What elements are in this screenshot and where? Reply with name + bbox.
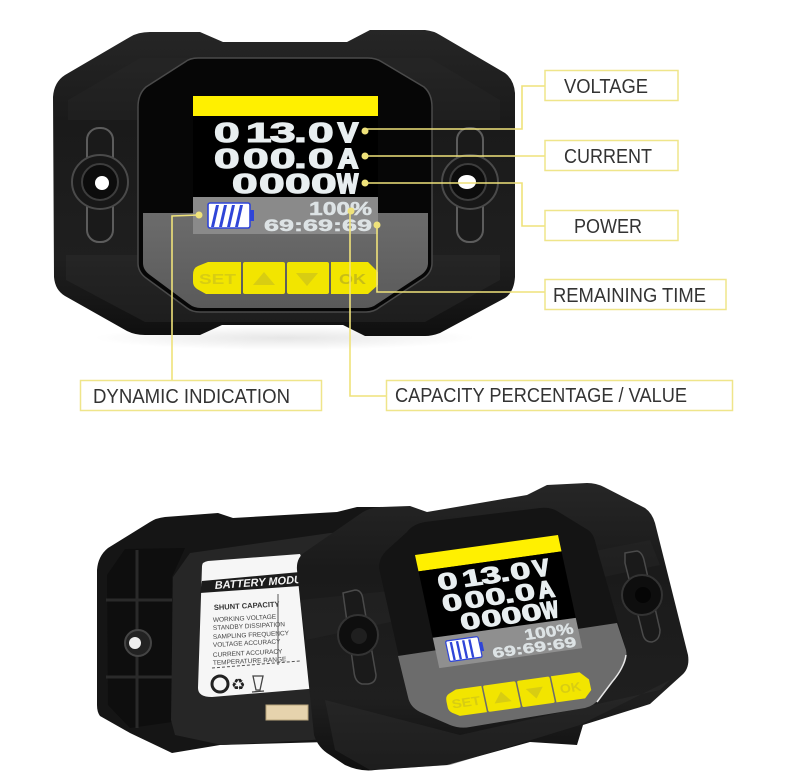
callout: dynamic indication (80, 212, 322, 410)
callout: capacity percentage: CAPACITY PERCENTAGE / VALUE (395, 385, 687, 407)
yellow header bar (415, 535, 562, 571)
control buttons: SET (199, 271, 236, 288)
callout: voltage: VOLTAGE (564, 76, 648, 98)
right mounting hole (442, 128, 498, 242)
LCD screen (415, 535, 593, 717)
callout: power: POWER (574, 216, 642, 238)
display bezel (138, 58, 432, 312)
top device: front view of battery monitor (53, 30, 515, 350)
left mounting hole (72, 128, 128, 242)
right mounting hole (622, 551, 662, 642)
rear device: back housing with label (97, 507, 400, 753)
current reading: A (535, 575, 556, 603)
callout: current (362, 140, 678, 170)
control buttons: OK (559, 679, 583, 696)
product label: STANDBY DISSIPATION (213, 621, 285, 632)
voltage reading: 013.0 (435, 557, 533, 596)
battery icon (445, 636, 485, 662)
product label: SAMPLING FREQUENCY (213, 630, 290, 641)
product label: VOLTAGE ACCURACY (213, 638, 281, 649)
recycling icons: ♻ (231, 675, 245, 694)
LCD screen (193, 96, 378, 235)
callout: remaining time (374, 222, 726, 310)
current reading: 000.0 (214, 143, 334, 175)
remaining time: 69:69:69 (491, 634, 578, 661)
remaining time: 69:69:69 (264, 216, 372, 235)
power reading: W (337, 169, 358, 200)
connector (266, 705, 308, 720)
current reading: 000.0 (440, 578, 538, 617)
product label: SHUNT CAPACITY (214, 600, 280, 612)
display bezel (379, 508, 626, 728)
voltage reading: V (338, 118, 359, 149)
callout: remaining time: REMAINING TIME (553, 285, 706, 307)
callout: voltage (362, 70, 678, 134)
capacity percent: 100% (309, 199, 372, 219)
voltage reading: 013.0 (214, 117, 334, 149)
callout: dynamic indication: DYNAMIC INDICATION (93, 386, 290, 408)
product label: TEMPERATURE RANGE (213, 656, 287, 667)
callout: capacity percentage (348, 208, 732, 410)
recycling icons (212, 675, 264, 694)
front device: angled view (297, 483, 688, 770)
capacity percent: 100% (523, 621, 575, 644)
product label: BATTERY MODULE (214, 573, 317, 592)
voltage reading: V (531, 554, 552, 582)
control buttons (444, 671, 593, 717)
callout: current: CURRENT (564, 146, 652, 168)
power reading: 0000 (232, 168, 337, 200)
current reading: A (338, 143, 358, 174)
rear plate (171, 530, 400, 745)
battery icon (208, 203, 254, 228)
control buttons (193, 262, 378, 294)
power reading: 0000 (458, 599, 544, 636)
yellow header bar (193, 96, 378, 116)
control buttons: SET (450, 693, 483, 712)
product label: WORKING VOLTAGE (213, 614, 277, 624)
power reading: W (539, 597, 561, 625)
left mounting hole (338, 590, 378, 684)
product label (198, 554, 320, 697)
control buttons: OK (339, 271, 366, 288)
callout: power (362, 180, 678, 240)
product label: CURRENT ACCURACY (213, 648, 283, 659)
